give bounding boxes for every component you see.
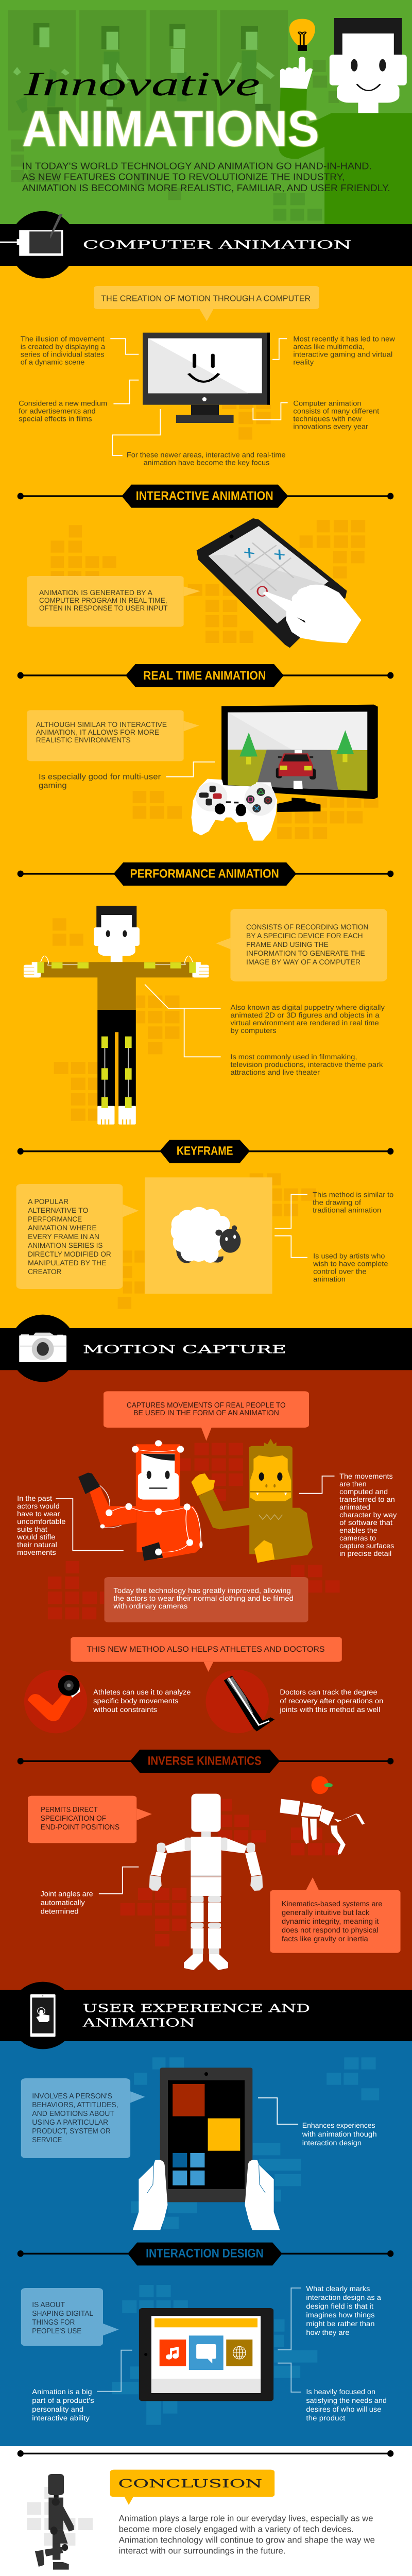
text: uncomfortable suits: In the past (17, 1494, 52, 1502)
banner: performance animation: PERFORMANCE ANIMATION (130, 867, 279, 880)
callout: shaping digital things: SHAPING DIGITAL (32, 2309, 93, 2317)
figure: wooden puppet (149, 1794, 263, 1970)
icon: monitor with racing game (221, 705, 378, 812)
text: doctors (280, 1688, 383, 1714)
banner: real time animation (18, 664, 393, 687)
callout: kinematics-based systems (270, 1877, 401, 1953)
text: joint angles (41, 1890, 93, 1916)
text: computed movements: are then (339, 1480, 367, 1488)
section: motion capture content (17, 1391, 397, 1592)
text: athletes: without constraints (93, 1705, 157, 1714)
text: uncomfortable suits: their natural (17, 1540, 57, 1549)
text: design field: design field is that it (306, 2302, 373, 2310)
text: multi-user gaming: gaming (39, 781, 67, 790)
text: uncomfortable suits: have to wear (17, 1510, 60, 1518)
panel: technology improved (105, 1577, 308, 1622)
callout: captures movements (104, 1391, 309, 1441)
callout: shaping digital things (21, 2288, 119, 2346)
text: joint angles: determined (41, 1907, 79, 1916)
icon: tablet held in hands (133, 2067, 280, 2230)
text: new medium: Considered a new medium (19, 399, 107, 408)
intro text (22, 160, 390, 193)
text: uncomfortable suits: actors would (17, 1502, 60, 1510)
text: traditional animation (313, 1191, 393, 1214)
banner: interaction design: INTERACTION DESIGN (146, 2247, 264, 2260)
callout: involves a person: AND EMOTIONS ABOUT (32, 2109, 114, 2117)
text: key focus: animation have become the key focus (144, 459, 269, 467)
icon: apple (312, 1776, 333, 1794)
callout: conclusion heading (110, 2470, 274, 2505)
callout: end-point positions: PERMITS DIRECT (41, 1805, 98, 1814)
text: techniques (293, 399, 379, 431)
text: illusion of movement: series of individual states (21, 350, 105, 359)
text: illusion of movement (21, 335, 105, 366)
banner: real time animation: REAL TIME ANIMATION (143, 669, 266, 682)
text: new medium: for advertisements and (19, 407, 96, 415)
text: illusion of movement: is created by displaying a (21, 343, 105, 351)
text: needs and desires: the product (306, 2414, 346, 2422)
icon: music note (166, 2347, 179, 2360)
callout: generated by program: OFTEN IN RESPONSE TO USER INPUT (39, 604, 168, 612)
icon: camera (19, 1333, 66, 1362)
text: techniques: techniques with new (293, 415, 362, 423)
callout: kinematics-based systems: generally intuitive but lack (282, 1908, 370, 1917)
callout: popular alternative: MANIPULATED BY THE (28, 1259, 107, 1267)
text: digital puppetry: by computers (230, 1026, 277, 1035)
text: computed movements: enables the (339, 1526, 377, 1534)
text: enhances experiences (302, 2121, 377, 2147)
section: computer animation content (19, 286, 395, 455)
callout: captures movements: BE USED IN THE FORM OF AN ANIMATION (133, 1409, 279, 1417)
text: illusion of movement: of a dynamic scene (21, 358, 84, 366)
character sweater (279, 88, 412, 224)
text: design field: might be rather than (306, 2319, 375, 2328)
text: design field (306, 2284, 381, 2336)
figure: actor with motion sensors (24, 906, 209, 1125)
text: enhances experiences: with animation though (302, 2130, 377, 2138)
icon: leg x-ray (205, 1670, 274, 1733)
text: key focus: For these newer areas, interactive and real-time (127, 451, 286, 459)
text: uncomfortable suits: would stifle (17, 1533, 56, 1541)
title: innovative: Innovative (23, 65, 260, 103)
panel: technology improved: Today the technology has greatly improved, allowing (113, 1586, 291, 1595)
callout: end-point positions (28, 1796, 152, 1843)
text: uncomfortable suits: movements (17, 1548, 56, 1556)
character hand pointing (280, 57, 313, 89)
text: filmmaking uses: attractions and live theater (230, 1068, 320, 1076)
text: key focus (127, 451, 286, 467)
section: motion capture lower (18, 1577, 393, 1843)
text: personality: personality and (32, 2405, 83, 2413)
callout: end-point positions: SPECIFICATION OF (41, 1814, 106, 1822)
text: conclusion: interact with our surroundings in the future. (119, 2546, 286, 2555)
text: needs and desires: Is heavily focused on (306, 2387, 375, 2396)
figure: actor in motion capture suit (78, 1440, 202, 1561)
text: conclusion (119, 2514, 375, 2555)
heading (82, 2002, 310, 2029)
hero section (8, 10, 412, 224)
icon: tablet with app tiles (139, 2308, 273, 2401)
text: personality: part of a product's (32, 2396, 94, 2404)
icon: light bulb (289, 19, 315, 51)
callout: popular alternative: A POPULAR (28, 1197, 68, 1206)
text: multi-user gaming (39, 772, 161, 790)
banner: performance animation (18, 862, 393, 886)
callout: generated by program (27, 576, 200, 627)
text: design field: What clearly marks (306, 2284, 370, 2293)
icon: smiling monitor (143, 333, 270, 423)
figure: walking character (35, 2474, 74, 2570)
section: performance animation (24, 906, 387, 1125)
text: new areas (293, 335, 395, 366)
text: computed movements: cameras to (339, 1534, 376, 1542)
text: techniques: innovations every year (293, 422, 368, 431)
icon: athlete arm with disc (24, 1670, 87, 1733)
callout: realistic environments: ANIMATION, IT ALLOWS FOR MORE (36, 728, 159, 736)
section header: motion capture (0, 1315, 412, 1382)
text: computed movements: computed and (339, 1487, 388, 1496)
banner: interactive animation (18, 485, 393, 508)
section: real time animation (18, 705, 393, 886)
callout: recording motion: FRAME AND USING THE (246, 940, 329, 948)
callout: involves a person: SERVICE (32, 2136, 62, 2144)
callout: popular alternative: DIRECTLY MODIFIED OR (28, 1250, 111, 1258)
text: athletes: Athletes can use it to analyze (93, 1688, 191, 1696)
section: interaction design (18, 2284, 393, 2457)
callout: popular alternative: PERFORMANCE (28, 1215, 82, 1223)
heading: USER EXPERIENCE AND (83, 2002, 310, 2015)
heading: COMPUTER ANIMATION (83, 238, 352, 251)
callout: realistic environments: REALISTIC ENVIRONMENTS (36, 736, 131, 744)
text: athletes (93, 1688, 191, 1714)
callout: shaping digital things: THINGS FOR (32, 2318, 75, 2326)
icon: game controller (191, 779, 277, 841)
banner: interaction design (18, 2243, 393, 2265)
text: new areas: reality (293, 358, 314, 366)
section: keyframe (16, 1140, 393, 1309)
banner: inverse kinematics: INVERSE KINEMATICS (148, 1754, 262, 1768)
panel: keyframe frame with sheep (145, 1177, 272, 1294)
callout: involves a person: USING A PARTICULAR (32, 2118, 108, 2126)
text: illusion of movement: The illusion of movement (21, 335, 105, 343)
icon: globe (233, 2346, 246, 2359)
callout: recording motion (216, 909, 387, 981)
text: uncomfortable suits: suits that (17, 1525, 47, 1533)
callout: generated by program: COMPUTER PROGRAM IN REAL TIME, (39, 596, 167, 604)
text: new medium (19, 399, 107, 423)
callout: popular alternative: ANIMATION SERIES IS (28, 1241, 102, 1249)
text: filmmaking uses (230, 1053, 383, 1076)
section: inverse kinematics (41, 1794, 401, 1970)
text: uncomfortable suits (17, 1494, 66, 1556)
heading: MOTION CAPTURE (83, 1343, 286, 1356)
text: personality (32, 2387, 94, 2422)
callout: shaping digital things: PEOPLE'S USE (32, 2327, 81, 2335)
section header: computer animation (0, 211, 352, 278)
icon: phone with hand (30, 1994, 56, 2037)
panel: technology improved: the actors to wear their normal clothing and be filmed (113, 1594, 294, 1602)
callout: kinematics-based systems: facts like gravity or inertia (282, 1935, 368, 1943)
figure: small puppet reaching for apple (280, 1799, 365, 1855)
text: enhances experiences: Enhances experiences (302, 2121, 375, 2129)
callout: captures movements: CAPTURES MOVEMENTS OF REAL PEOPLE TO (127, 1401, 286, 1409)
callout: popular alternative (16, 1184, 139, 1289)
text: joint angles: Joint angles are (41, 1890, 93, 1898)
callout: end-point positions: END-POINT POSITIONS (41, 1823, 119, 1831)
icon: drawing tablet (0, 214, 63, 256)
figure: animated monster character (191, 1439, 313, 1563)
text: traditional animation: the drawing of (313, 1198, 361, 1207)
callout: involves a person (21, 2078, 145, 2158)
text: new areas: areas like multimedia, (293, 343, 365, 351)
heading: ANIMATION (82, 2016, 195, 2029)
callout: popular alternative: EVERY FRAME IN AN (28, 1232, 99, 1241)
text: uncomfortable suits: uncomfortable (17, 1517, 66, 1526)
callout: popular alternative: ANIMATION WHERE (28, 1224, 97, 1232)
panel: technology improved: with ordinary cameras (113, 1602, 187, 1610)
callout: popular alternative: CREATOR (28, 1267, 61, 1276)
text: computed movements: animated (339, 1503, 370, 1511)
text: traditional animation: traditional animation (313, 1206, 381, 1214)
text: athletes: specific body movements (93, 1697, 178, 1705)
text: multi-user gaming: Is especially good for multi-user (39, 772, 161, 781)
callout: involves a person: INVOLVES A PERSON'S (32, 2092, 112, 2100)
banner: inverse kinematics (18, 1750, 393, 1773)
section header: user experience and animation (0, 1982, 412, 2049)
text: needs and desires (306, 2387, 387, 2422)
text: artists: animation (313, 1275, 346, 1283)
callout: athletes and doctors (71, 1637, 342, 1672)
callout: involves a person: PRODUCT, SYSTEM OR (32, 2127, 111, 2135)
text: artists: control over the (313, 1267, 367, 1276)
banner: keyframe: KEYFRAME (177, 1144, 233, 1158)
callout: definition (94, 286, 319, 321)
text: personality: Animation is a big (32, 2387, 92, 2396)
callout: involves a person: BEHAVIORS, ATTITUDES, (32, 2100, 118, 2109)
text: enhances experiences: interaction design (302, 2139, 362, 2147)
callout: generated by program: ANIMATION IS GENERATED BY A (39, 588, 152, 597)
callout: conclusion heading: CONCLUSION (118, 2477, 262, 2490)
text: computed movements (339, 1472, 397, 1557)
callout: shaping digital things: IS ABOUT (32, 2300, 65, 2309)
section: conclusion (18, 2470, 394, 2576)
callout: popular alternative: ALTERNATIVE TO (28, 1206, 88, 1214)
text: personality: interactive ability (32, 2414, 90, 2422)
icon: speech bubble (196, 2344, 216, 2363)
text: filmmaking uses: Is most commonly used in filmmaking, (230, 1053, 357, 1061)
banner: keyframe (18, 1140, 393, 1163)
section: user experience (18, 2057, 393, 2265)
callout: realistic environments (27, 710, 199, 761)
section: interactive animation (18, 451, 393, 687)
callout: realistic environments: ALTHOUGH SIMILAR TO INTERACTIVE (36, 720, 167, 728)
character head (330, 18, 407, 113)
text: joint angles: automatically (41, 1899, 85, 1907)
text: techniques: Computer animation (293, 399, 362, 408)
text: new medium: special effects in films (19, 415, 92, 423)
text: artists (313, 1252, 388, 1283)
banner: interactive animation: INTERACTIVE ANIMATION (136, 489, 273, 502)
icon: tablet with tic-tac-toe and hand (197, 518, 362, 648)
text: design field: how they are (306, 2328, 350, 2336)
text: design field: imagines how things (306, 2311, 375, 2319)
text: digital puppetry (230, 1003, 385, 1035)
